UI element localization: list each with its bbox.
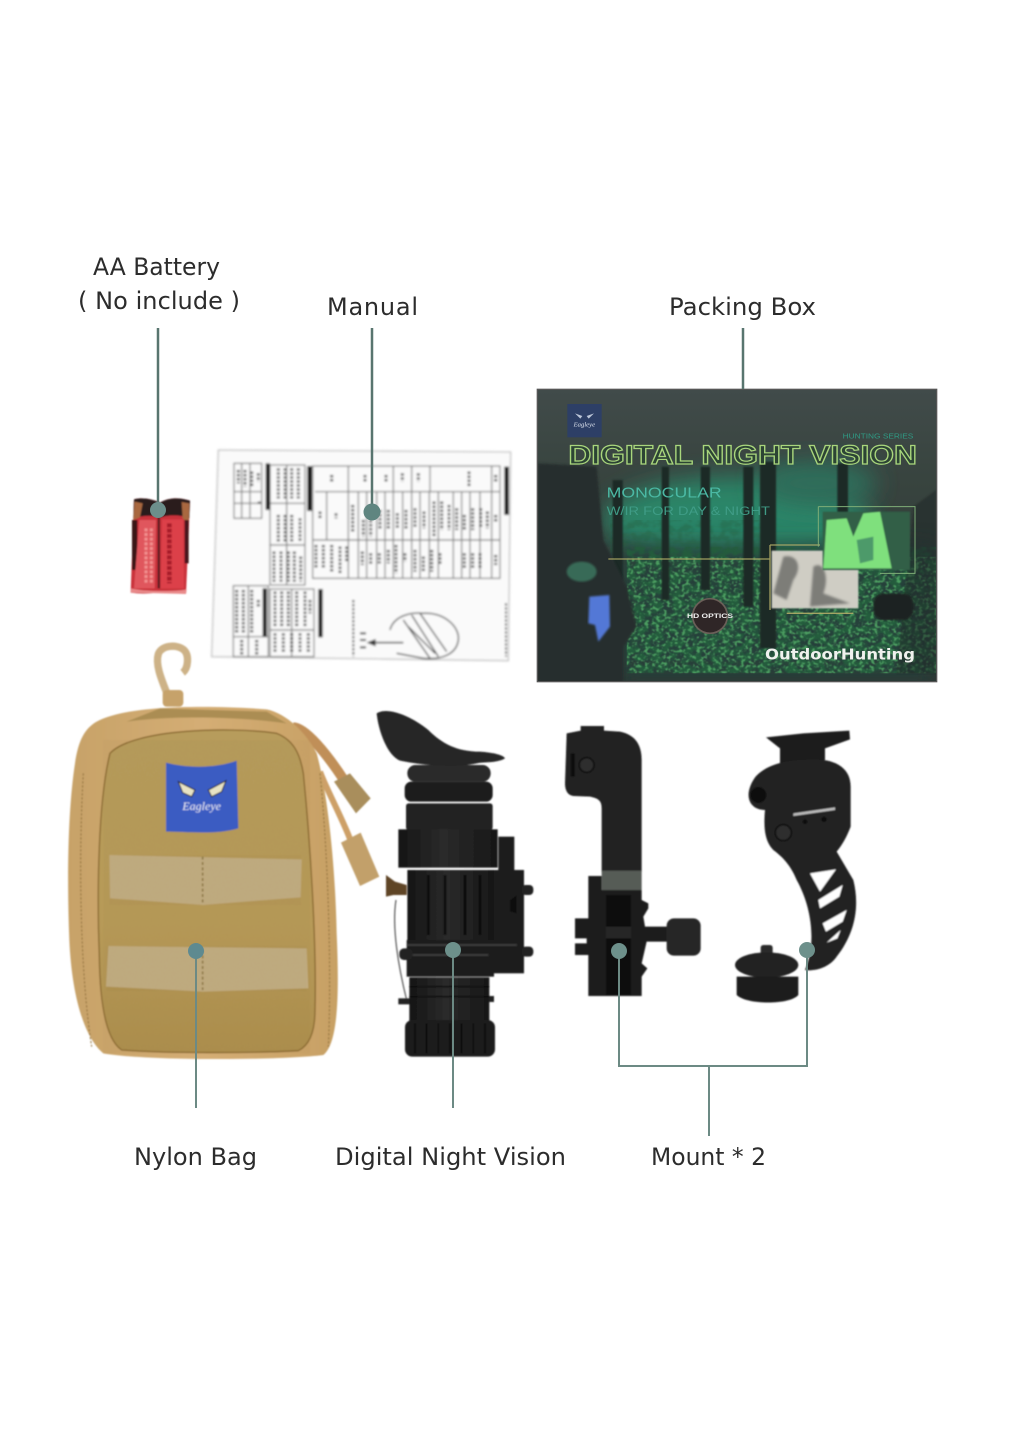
- box brand line: OutdoorHunting: [765, 645, 915, 663]
- blue logo patch: [166, 761, 238, 832]
- webbing strap lower: [106, 946, 308, 992]
- blue logo patch: Eagleye: [181, 799, 222, 813]
- adjustment knob: [667, 918, 701, 956]
- box logo: Eagleye: [573, 422, 595, 429]
- photo: AA batteries: [131, 498, 190, 594]
- box subtitle line two: W/IR FOR DAY & NIGHT: [607, 504, 771, 518]
- manual device sketch: [360, 613, 458, 659]
- hunter silhouette: [538, 463, 637, 682]
- leader: manual: [364, 328, 380, 520]
- side seam: [81, 773, 92, 1047]
- thermal grey image: [772, 551, 858, 608]
- leader: nylon bag: [188, 943, 204, 1108]
- main table: [233, 463, 500, 657]
- leader: mounts bracket: [611, 942, 815, 1136]
- manual text marks: [237, 468, 506, 657]
- box logo: [567, 404, 602, 437]
- label: Nylon Bag: Nylon Bag: [134, 1143, 257, 1171]
- box small heading: HUNTING SERIES: [843, 431, 913, 440]
- manual black section tabs: [263, 463, 509, 637]
- label: Manual: Manual: [327, 293, 418, 321]
- label: Mount * 2: Mount * 2: [651, 1143, 766, 1171]
- photo: instruction manual sheet: [212, 450, 511, 661]
- webbing strap upper: [109, 855, 302, 905]
- photo: mount two: [735, 731, 856, 1002]
- bag body: [68, 707, 338, 1059]
- photo: mount one: [565, 726, 701, 996]
- carabiner clip: [157, 646, 188, 707]
- box title: DIGITAL NIGHT VISION: [568, 440, 917, 470]
- mount base: [761, 945, 773, 958]
- bag front panel: [98, 730, 315, 1053]
- zipper pulls: [293, 727, 379, 886]
- box subtitle: MONOCULAR: [607, 485, 722, 501]
- forest trees: [613, 462, 936, 673]
- photo: packing box: [537, 389, 937, 682]
- leader lines and markers: [150, 328, 815, 1136]
- label: No include: ( No include ): [78, 287, 240, 315]
- leader: packing box: [742, 328, 744, 389]
- leader: night vision: [445, 942, 461, 1108]
- label: Digital Night Vision: Digital Night Vision: [335, 1143, 566, 1171]
- eyecup: [377, 711, 505, 766]
- HD optics badge: HD OPTICS: [687, 613, 733, 620]
- HUD lines: [608, 507, 915, 613]
- photo: digital night vision monocular: [377, 711, 533, 1057]
- label: AA Battery: AA Battery: [93, 253, 220, 281]
- label: Packing Box: Packing Box: [669, 293, 816, 321]
- photo: nylon bag: [68, 646, 379, 1059]
- leader: AA battery: [150, 328, 166, 518]
- green image: [823, 512, 910, 570]
- HD optics badge: [687, 599, 733, 633]
